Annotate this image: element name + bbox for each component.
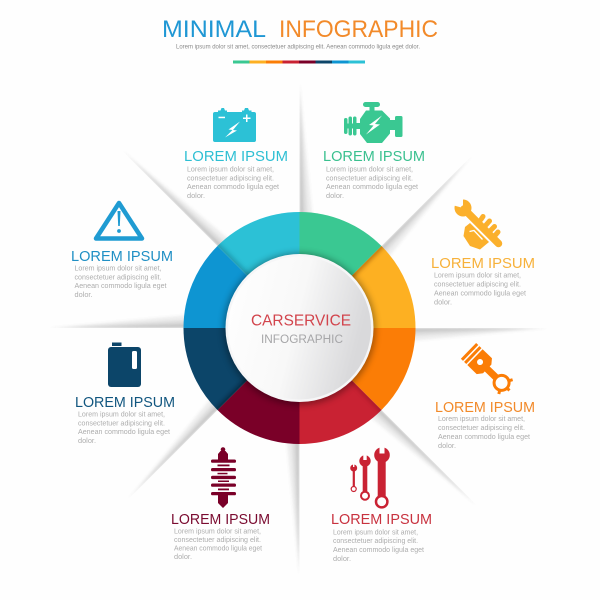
center heading: CARSERVICE xyxy=(251,312,351,330)
text: engine xyxy=(326,164,419,200)
text: battery: Lorem ipsum dolor sit amet, xyxy=(187,164,274,174)
text: wrench in fist xyxy=(434,270,527,306)
text: battery: Aenean commodo ligula eget xyxy=(187,182,280,191)
text: three wrenches: Lorem ipsum dolor sit amet, xyxy=(333,528,418,536)
text: wrench in fist: Aenean commodo ligula eget xyxy=(434,288,527,298)
segment: maroon xyxy=(218,328,300,444)
text: engine: consectetuer adipiscing elit. xyxy=(326,173,413,182)
text: wrench in fist: Lorem ipsum dolor sit amet, xyxy=(434,270,521,280)
text: shock absorber: dolor. xyxy=(174,552,192,561)
title xyxy=(162,16,438,43)
text: warning: dolor. xyxy=(74,290,92,299)
text: warning: consectetuer adipiscing elit. xyxy=(74,272,162,281)
text: piston xyxy=(438,414,531,450)
radial shadow dividers xyxy=(50,83,548,575)
text: warning: Aenean commodo ligula eget xyxy=(74,281,167,290)
segment: red xyxy=(300,328,382,444)
text: battery: dolor. xyxy=(187,191,205,200)
text: piston: Aenean commodo ligula eget xyxy=(438,432,531,441)
text: engine: Aenean commodo ligula eget xyxy=(326,182,419,191)
text: oil jug xyxy=(78,410,171,445)
heading: oil jug: LOREM IPSUM xyxy=(75,394,175,411)
text: oil jug: Aenean commodo ligula eget xyxy=(78,427,171,436)
text: shock absorber: Lorem ipsum dolor sit amet, xyxy=(174,526,261,536)
text: wrench in fist: dolor. xyxy=(434,298,452,306)
text: warning: Lorem ipsum dolor sit amet, xyxy=(74,264,162,272)
text: three wrenches xyxy=(333,528,425,563)
text: piston: Lorem ipsum dolor sit amet, xyxy=(438,414,525,423)
heading: battery: LOREM IPSUM xyxy=(184,148,288,165)
text: oil jug: Lorem ipsum dolor sit amet, xyxy=(78,410,165,418)
text: battery xyxy=(187,164,280,200)
icon: piston xyxy=(461,343,517,398)
segment: yellow xyxy=(300,246,416,328)
text: battery: consectetuer adipiscing elit. xyxy=(187,173,274,182)
heading: engine: LOREM IPSUM xyxy=(323,148,425,165)
text: piston: consectetuer adipiscing elit. xyxy=(438,423,525,432)
text: three wrenches: consectetuer adipiscing elit. xyxy=(333,536,418,545)
text: oil jug: dolor. xyxy=(78,436,96,445)
text: wrench in fist: consectetuer adipiscing elit. xyxy=(434,280,521,288)
colour bar xyxy=(233,60,365,64)
text: shock absorber: consectetuer adipiscing elit. xyxy=(174,535,261,544)
icon: battery xyxy=(213,108,256,142)
text: three wrenches: Aenean commodo ligula eget xyxy=(333,545,425,554)
heading: wrench in fist: LOREM IPSUM xyxy=(431,255,535,272)
icon: warning triangle xyxy=(96,203,142,238)
icon: wrench in fist xyxy=(453,195,498,250)
heading: warning: LOREM IPSUM xyxy=(71,248,173,265)
segment: green xyxy=(300,212,382,328)
subtitle: Lorem ipsum dolor sit amet, consectetuer adipiscing elit. Aenean commodo ligula eget dolor. xyxy=(176,44,420,50)
text: engine: dolor. xyxy=(326,191,344,200)
title: MINIMAL xyxy=(162,16,266,43)
title: INFOGRAPHIC xyxy=(279,16,438,43)
segment: orange xyxy=(300,328,416,410)
center subheading: INFOGRAPHIC xyxy=(261,332,343,346)
icon: oil jug xyxy=(108,342,141,387)
center circle xyxy=(226,254,374,402)
text: shock absorber xyxy=(174,526,263,561)
heading: shock absorber: LOREM IPSUM xyxy=(171,511,270,528)
icon: engine xyxy=(344,102,402,143)
segment: blue xyxy=(184,246,300,328)
heading: piston: LOREM IPSUM xyxy=(435,399,535,416)
icon: three wrenches xyxy=(350,446,390,507)
text: piston: dolor. xyxy=(438,441,456,450)
segment: teal xyxy=(218,212,300,328)
text: shock absorber: Aenean commodo ligula eget xyxy=(174,544,263,552)
text: warning xyxy=(74,264,167,299)
text: engine: Lorem ipsum dolor sit amet, xyxy=(326,164,413,174)
text: oil jug: consectetuer adipiscing elit. xyxy=(78,418,165,427)
icon: shock absorber xyxy=(211,447,236,508)
donut ring xyxy=(178,205,420,450)
segment: navy xyxy=(184,328,300,410)
text: three wrenches: dolor. xyxy=(333,554,351,563)
heading: three wrenches: LOREM IPSUM xyxy=(331,511,432,528)
